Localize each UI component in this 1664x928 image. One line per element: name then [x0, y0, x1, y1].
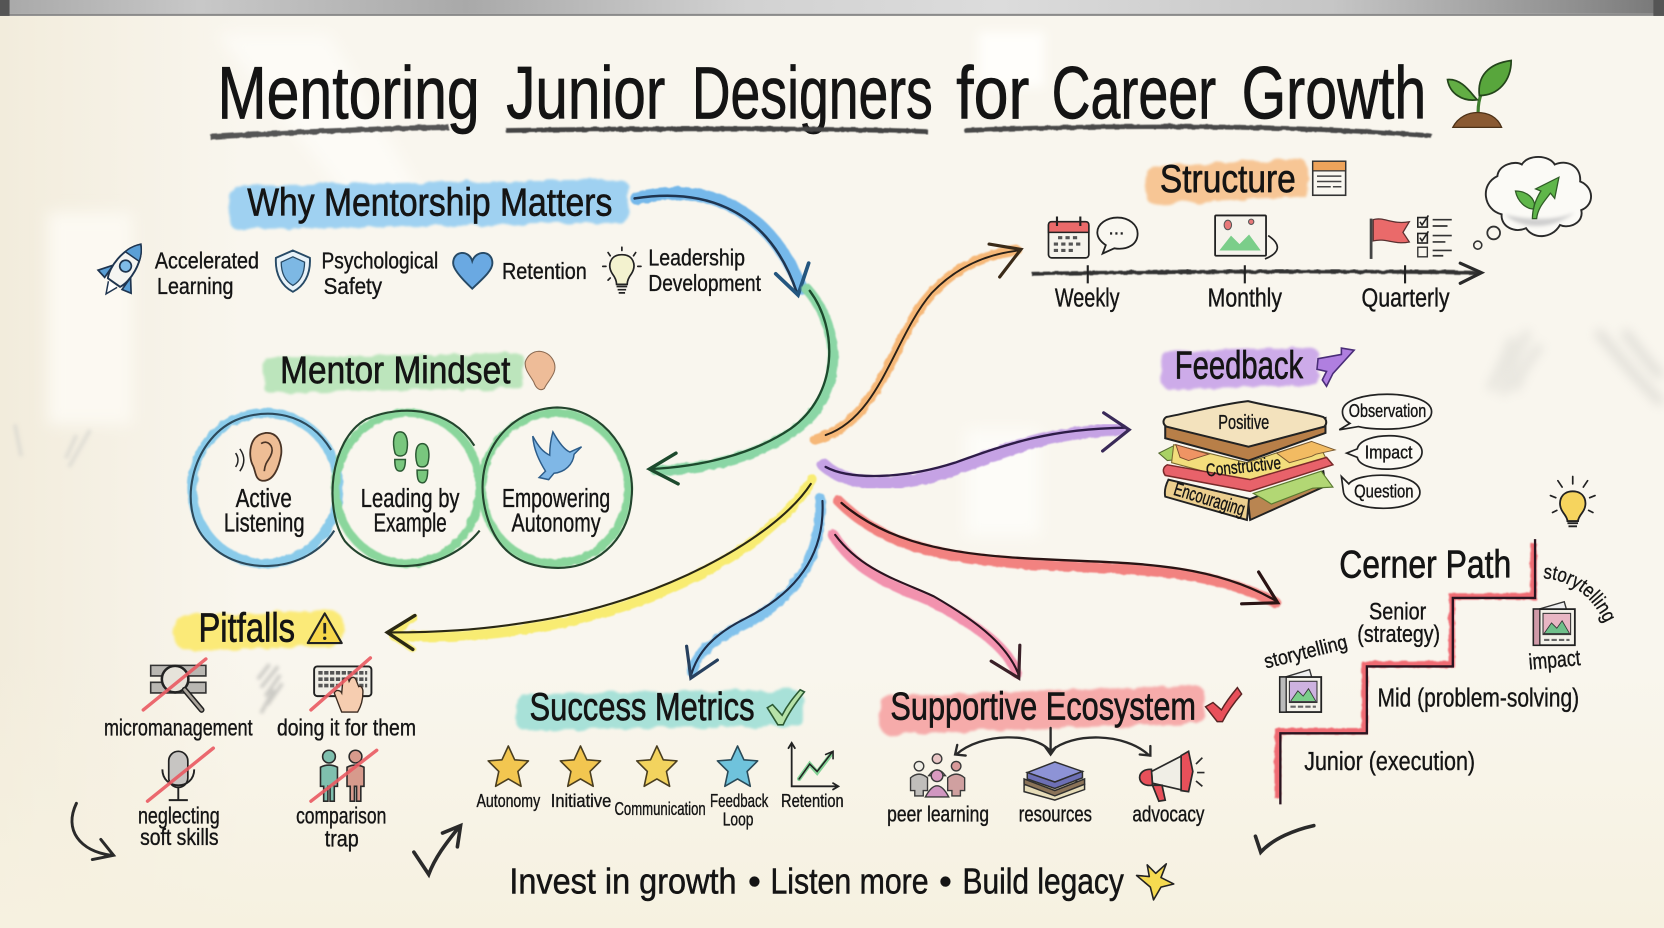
label: doing it for them: doing it for them — [277, 714, 416, 740]
label: storytelling left: storytelling — [1262, 632, 1350, 673]
label: empowering autonomy — [502, 485, 610, 538]
icon: flag — [1371, 219, 1409, 259]
icon: stacked books — [1024, 762, 1085, 800]
label: feedback loop: Feedback — [710, 791, 769, 811]
heading highlight: mentor mindset — [263, 353, 525, 393]
label: active listening: Active — [236, 485, 292, 513]
heading: mentor mindset: Mentor Mindset — [280, 349, 511, 392]
arrow: blue to green hub — [635, 193, 809, 295]
label: autonomy: Autonomy — [476, 791, 540, 811]
bubble: question: Question — [1354, 482, 1414, 502]
heading highlight: why mentorship matters — [229, 179, 629, 229]
icon: micromanagement magnifier — [143, 659, 206, 710]
label: neglecting soft skills — [138, 802, 220, 850]
icon: star initiative — [560, 746, 601, 786]
arrow: green to mentor mindset — [649, 289, 833, 484]
heading: structure: Structure — [1160, 157, 1296, 201]
title — [210, 51, 1432, 137]
arrow: orange to structure — [815, 244, 1021, 439]
icon: ear blob — [525, 351, 555, 390]
label: monthly: Monthly — [1208, 285, 1282, 313]
label: senior: (strategy) — [1357, 621, 1440, 648]
icon: sprout — [1448, 60, 1511, 127]
label: resources: resources — [1019, 801, 1092, 826]
title: Junior — [506, 51, 665, 134]
label: weekly: Weekly — [1055, 285, 1120, 313]
heading: success metrics: Success Metrics — [530, 685, 755, 729]
heading highlight: supportive ecosystem — [879, 685, 1205, 735]
bottom slice — [1248, 471, 1325, 520]
branching arrows — [955, 728, 1150, 756]
bubble: impact: Impact — [1365, 442, 1412, 462]
circle: leading by example — [332, 411, 480, 566]
top slice — [1165, 418, 1325, 461]
section: mentor mindset — [191, 349, 632, 568]
heading: supportive ecosystem: Supportive Ecosystem — [890, 684, 1196, 728]
footer message: • — [939, 861, 952, 902]
icon: ear — [236, 433, 281, 481]
heading: career path: Cerner Path — [1339, 542, 1511, 586]
icon: light bulb — [603, 247, 641, 293]
icon: shield — [276, 250, 310, 292]
icon: horn — [1317, 348, 1354, 386]
icon: document — [1313, 161, 1346, 195]
footer message — [509, 861, 1174, 902]
label: leadership development — [648, 244, 761, 296]
title: Career — [1052, 51, 1216, 134]
heading: pitfalls: Pitfalls — [198, 604, 295, 650]
icon: check mark — [767, 690, 804, 725]
label: active listening: Listening — [224, 510, 305, 538]
check doodle — [1255, 826, 1314, 852]
label: storytelling right: storytelling — [1544, 566, 1614, 624]
footer message: Invest in growth — [509, 861, 736, 902]
label: senior: Senior — [1369, 599, 1426, 626]
label: leadership development: Development — [648, 270, 761, 296]
icon: calendar — [1048, 216, 1089, 258]
bubble: observation — [1339, 394, 1432, 430]
label: feedback loop: Loop — [723, 810, 753, 830]
circle: empowering autonomy — [482, 407, 632, 568]
label: micromanagement: micromanagement — [104, 714, 253, 740]
label: feedback loop — [710, 791, 769, 830]
bubble: observation: Observation — [1349, 401, 1426, 421]
label: neglecting soft skills: neglecting — [138, 802, 220, 828]
icon: photo review — [1215, 215, 1277, 259]
arrow: blue to success metrics — [687, 499, 823, 678]
icon: footprints — [394, 432, 429, 483]
timeline — [1032, 263, 1481, 313]
arrow: purple to feedback — [824, 413, 1129, 483]
label: communication: Communication — [614, 799, 706, 819]
icon: thought cloud — [1474, 157, 1591, 249]
label: leading by example: Leading by — [361, 485, 460, 513]
section: structure — [1032, 157, 1591, 313]
footer message: • — [748, 861, 761, 902]
label: psychological safety: Psychological — [322, 247, 438, 273]
label: comparison trap — [296, 802, 386, 851]
label: leadership development: Leadership — [648, 244, 745, 270]
label: initiative: Initiative — [551, 791, 611, 811]
icon: megaphone — [1140, 751, 1204, 801]
section: supportive ecosystem — [879, 684, 1242, 826]
label: senior — [1357, 599, 1440, 648]
icon: notebook right — [1533, 602, 1575, 645]
label: peer learning: peer learning — [887, 801, 989, 826]
title: for — [956, 51, 1029, 134]
arrow: black curved doodle — [72, 803, 114, 860]
label: active listening — [224, 485, 305, 538]
label: retention: Retention — [781, 791, 844, 811]
label: accelerated learning: Accelerated — [155, 247, 259, 273]
icon: rocket — [90, 233, 157, 305]
icon: checklist — [1418, 215, 1452, 257]
label: accelerated learning: Learning — [157, 273, 233, 299]
icon: microphone — [148, 748, 213, 801]
label: quarterly: Quarterly — [1362, 285, 1450, 313]
arrow: black check doodle — [414, 826, 461, 874]
icon: dove — [533, 432, 582, 480]
staircase — [1278, 539, 1535, 804]
label: impact: impact — [1527, 645, 1582, 675]
lettuce left — [1159, 446, 1189, 461]
label: junior: Junior (execution) — [1304, 748, 1475, 776]
arrow: pink to supportive ecosystem — [833, 535, 1020, 678]
circle: active listening — [191, 413, 339, 566]
heading highlight: pitfalls — [173, 609, 344, 651]
label: mid: Mid (problem-solving) — [1377, 685, 1579, 713]
section: feedback — [1159, 343, 1432, 521]
icon: chat bubble — [1097, 218, 1138, 254]
title: Designers — [692, 51, 933, 134]
label: constructive: Constructive — [1205, 453, 1282, 480]
icon: red check — [1206, 688, 1242, 722]
title: Mentoring — [218, 51, 480, 134]
icon: warning triangle — [308, 613, 342, 643]
icon: star feedback loop — [717, 746, 758, 786]
section: pitfalls — [72, 604, 461, 874]
label: comparison trap: comparison — [296, 802, 386, 828]
icon: yellow bulb — [1550, 476, 1595, 526]
arrow: yellow to pitfalls — [387, 480, 812, 649]
bubble: impact — [1347, 436, 1422, 469]
icon: comparison people — [311, 750, 377, 801]
label: psychological safety: Safety — [324, 273, 382, 299]
cheese and tomato fillings — [1172, 441, 1327, 484]
label: comparison trap: trap — [325, 825, 359, 851]
label: retention: Retention — [502, 258, 587, 284]
heading: feedback: Feedback — [1175, 343, 1303, 387]
label: leading by example — [361, 485, 460, 538]
icon: sparkle star — [1137, 864, 1174, 900]
title: Growth — [1242, 51, 1426, 134]
footer message: Listen more — [770, 861, 929, 902]
icon: keyboard and hand — [311, 658, 371, 712]
icon: growth chart — [788, 743, 838, 790]
label: psychological safety — [322, 247, 438, 299]
icon: feedback sandwich — [1159, 401, 1335, 521]
heading highlight: feedback — [1160, 346, 1320, 390]
lettuce right — [1253, 471, 1333, 504]
section: success metrics — [476, 685, 844, 830]
heading highlight: success metrics — [515, 689, 803, 730]
heading highlight: structure — [1144, 158, 1309, 205]
icon: notebook left — [1280, 670, 1321, 712]
heading: why mentorship matters: Why Mentorship Matters — [247, 180, 612, 224]
label: encouraging: Encouraging — [1171, 479, 1247, 521]
label: positive: Positive — [1218, 412, 1269, 434]
label: empowering autonomy: Autonomy — [512, 510, 601, 538]
smudge — [258, 664, 282, 713]
bubble: question — [1341, 475, 1420, 508]
icon: peer learning — [911, 754, 965, 797]
label: neglecting soft skills: soft skills — [140, 824, 219, 850]
arrow: red to career path — [838, 501, 1278, 604]
label: leading by example: Example — [374, 510, 447, 538]
icon: star communication — [637, 746, 677, 786]
section: career path — [1254, 476, 1614, 856]
label: accelerated learning — [155, 247, 259, 299]
icon: heart — [453, 253, 492, 289]
label: advocacy: advocacy — [1132, 801, 1205, 826]
section: why mentorship matters — [90, 179, 809, 305]
footer message: Build legacy — [963, 861, 1124, 902]
icon: star autonomy — [488, 746, 528, 786]
label: empowering autonomy: Empowering — [502, 485, 610, 513]
